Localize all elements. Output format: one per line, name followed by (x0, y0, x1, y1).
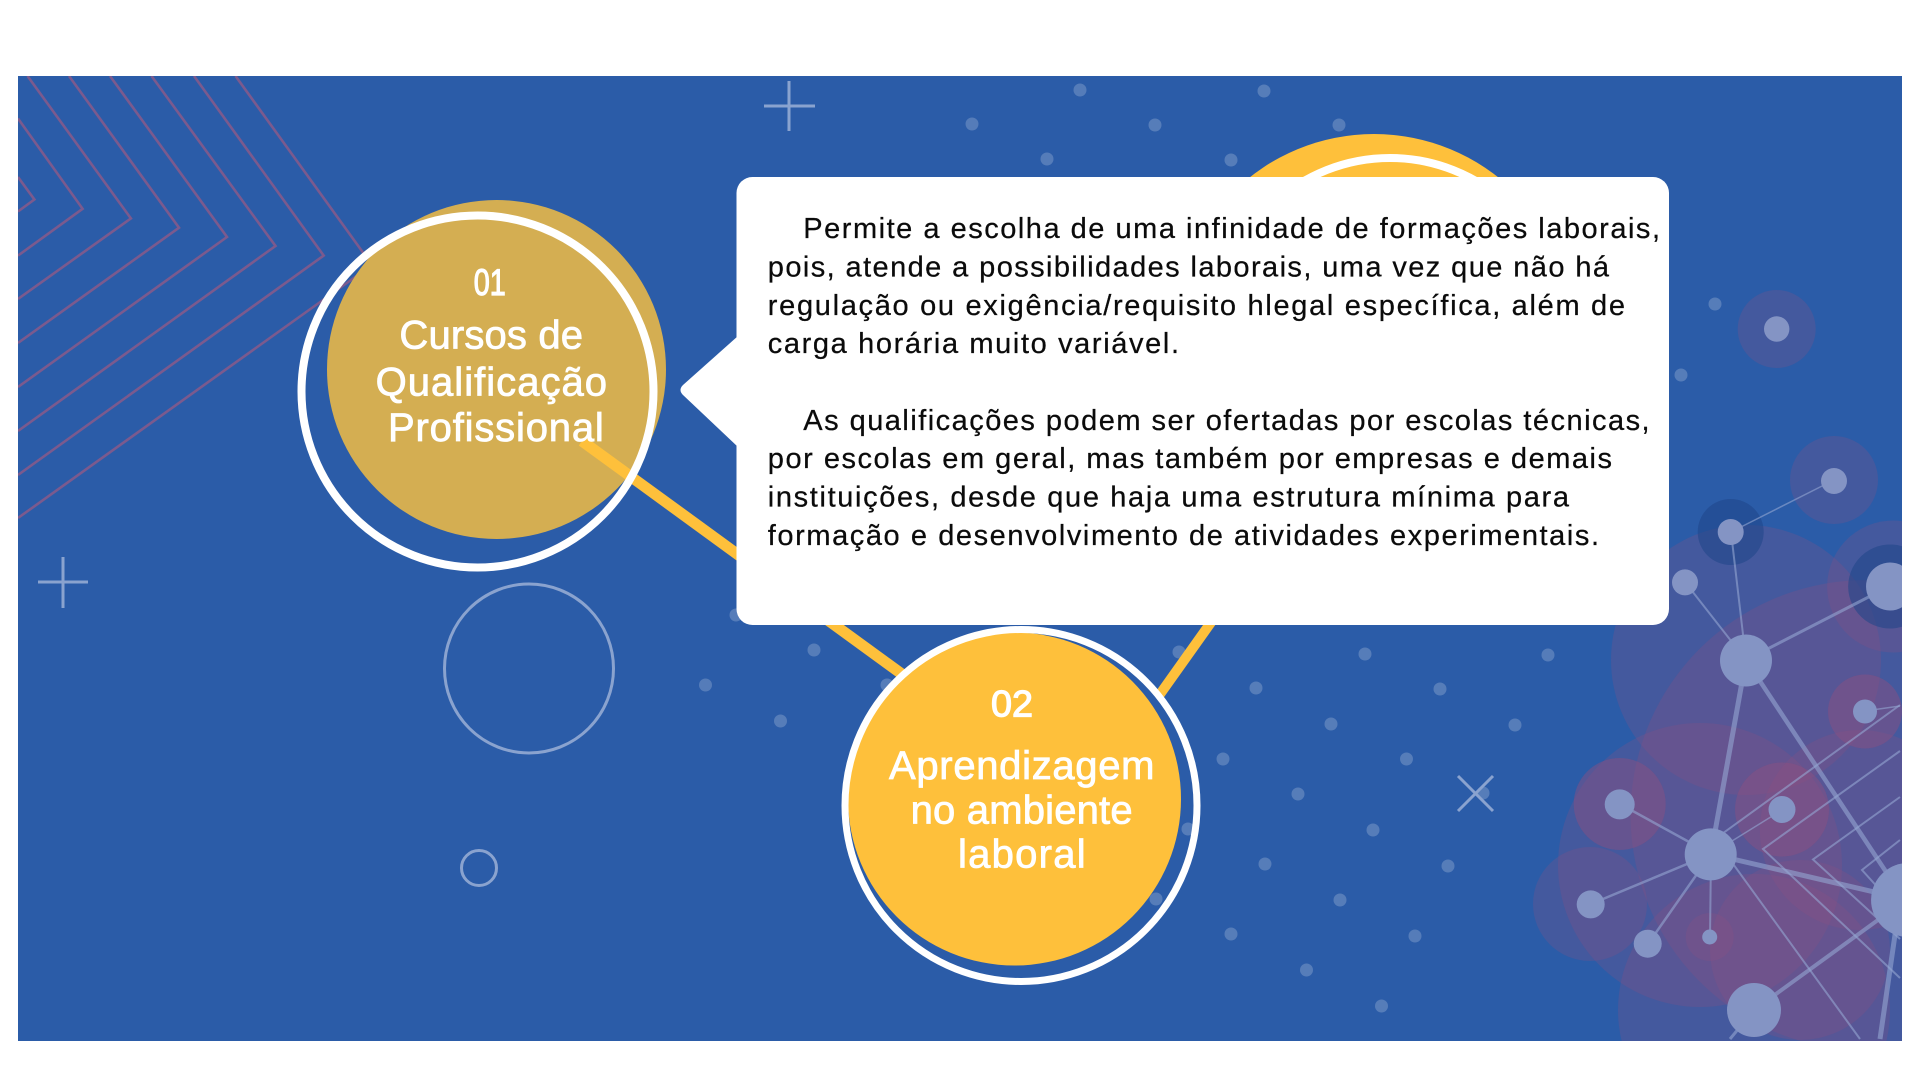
dark node halos (1698, 499, 1902, 628)
dot lattice (699, 84, 1722, 1012)
panel: callout card (680, 177, 1669, 625)
icon: plus left (38, 557, 88, 608)
node 01 title (377, 319, 606, 442)
node 02 title: Aprendizagem (889, 744, 1154, 788)
node 01 title: Cursos de (399, 314, 583, 358)
connector 02 to 03 (1158, 621, 1212, 697)
node 02 title (888, 750, 1152, 868)
node 02 gold disc (848, 632, 1181, 966)
node 01 title: Qualificação (376, 361, 607, 405)
node 02 title: no ambiente (911, 788, 1133, 832)
network nodes (1577, 316, 1902, 1037)
connector 01 to 02 (582, 441, 910, 680)
node 01 gold disc (327, 200, 666, 539)
node 01 label (376, 262, 607, 450)
callout paragraph 1 (768, 213, 1660, 360)
decorative small outlined circle (462, 850, 496, 886)
network connections (1591, 480, 1900, 1039)
icon: plus top (764, 81, 815, 131)
decorative large outlined circle (444, 584, 614, 753)
node 01 number: 01 (474, 262, 506, 303)
icon: cross (1458, 776, 1493, 811)
callout paragraph 1: Permite a escolha de uma infinidade de formações laborais, (803, 213, 1660, 245)
callout body (736, 177, 1669, 625)
circle 03 behind card (1250, 134, 1498, 177)
node 02 ring (845, 630, 1197, 982)
callout paragraph 2: formação e desenvolvimento de atividades experimentais. (768, 520, 1599, 552)
network blobs (1533, 290, 1902, 1041)
node 02 number: 02 (991, 684, 1033, 725)
callout paragraph 2: por escolas em geral, mas também por empresas e demais (768, 443, 1612, 475)
network illustration (1533, 290, 1902, 1041)
callout paragraph 1: pois, atende a possibilidades laborais, uma vez que não há (768, 251, 1610, 283)
node 02 title: laboral (958, 833, 1086, 877)
callout paragraph 2 (768, 405, 1650, 552)
node 01 ring (302, 216, 654, 568)
node 02 label (889, 684, 1154, 877)
callout paragraph 2: As qualificações podem ser ofertadas por escolas técnicas, (803, 405, 1650, 437)
callout paragraph 1: regulação ou exigência/requisito hlegal específica, além de (768, 290, 1625, 322)
callout paragraph 2: instituições, desde que haja uma estrutura mínima para (768, 481, 1570, 513)
callout tail (680, 336, 738, 447)
chevron line pattern (18, 76, 372, 518)
callout paragraph 1: carga horária muito variável. (768, 328, 1179, 360)
node 01 title: Profissional (388, 406, 604, 450)
